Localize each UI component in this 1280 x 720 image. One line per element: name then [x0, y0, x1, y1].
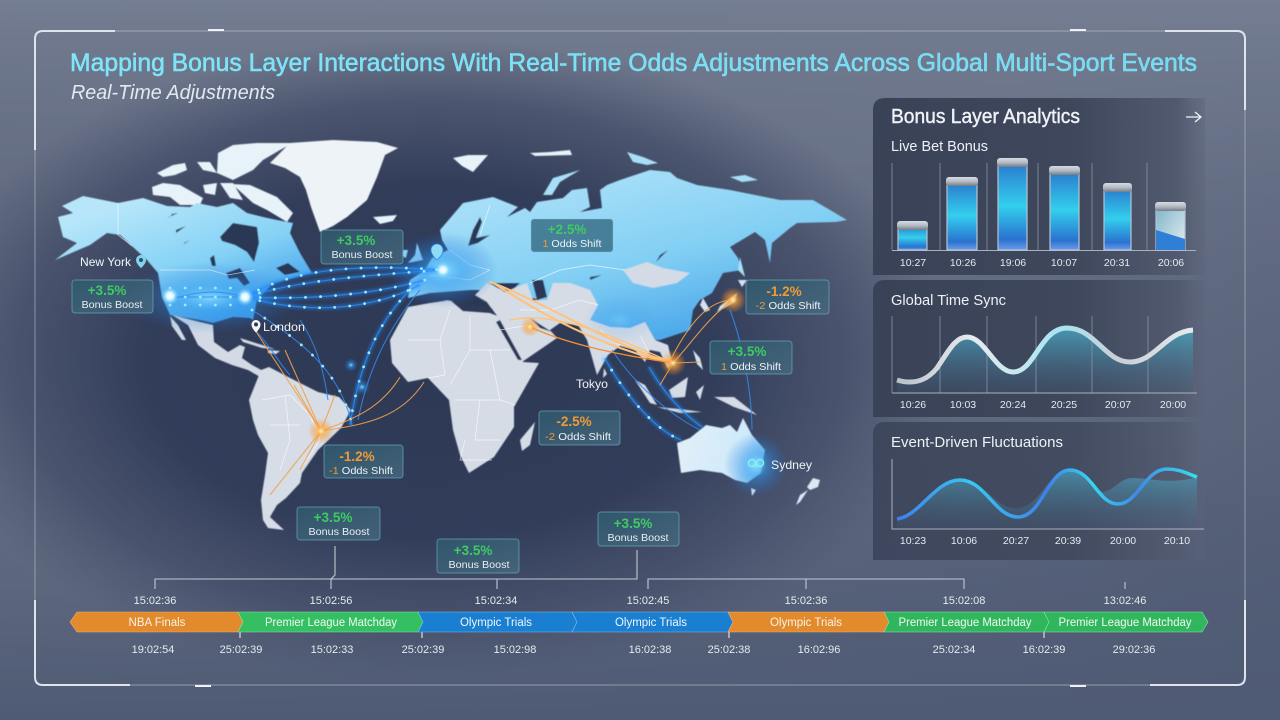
bar chart: 19:06	[1000, 257, 1026, 269]
callout: timeline bonus one: Bonus Boost	[308, 526, 370, 538]
callout: timeline bonus two: Bonus Boost	[448, 559, 510, 571]
callout: asia odds: +3.5%	[728, 344, 766, 359]
arrow	[1186, 112, 1201, 122]
callout: timeline bonus two: +3.5%	[454, 543, 492, 558]
callout: timeline bonus one: +3.5%	[314, 510, 352, 525]
panel: bonus layer analytics	[873, 98, 1205, 275]
top times: 13:02:46	[1104, 595, 1146, 607]
wave chart: 20:00	[1110, 535, 1136, 547]
bar chart: 10:07	[1051, 257, 1077, 269]
callout: timeline bonus two	[437, 539, 519, 573]
pin: london: London	[263, 320, 305, 334]
top times: 15:02:56	[310, 595, 352, 607]
south asia and middle east	[475, 283, 672, 375]
orange route lines	[255, 300, 733, 495]
blue route lines	[170, 268, 752, 440]
bar chart: 20:06	[1158, 257, 1184, 269]
callout: new york bonus	[72, 280, 153, 313]
bottom times: 29:02:36	[1113, 644, 1155, 656]
madagascar	[520, 422, 535, 451]
chevron: premier league: Premier League Matchday	[265, 617, 397, 629]
callout: russia odds: 1 Odds Shift	[542, 238, 602, 250]
callout: south america odds	[324, 445, 403, 478]
area chart: 20:25	[1051, 399, 1077, 411]
label: tokyo: Tokyo	[576, 377, 608, 391]
wave chart: 20:10	[1164, 535, 1190, 547]
new zealand	[751, 478, 820, 505]
greenland	[270, 140, 398, 232]
inland seas	[425, 217, 668, 310]
area chart: 10:26	[900, 399, 926, 411]
callout: south america odds: -1.2%	[339, 449, 375, 464]
area chart: 10:03	[950, 399, 976, 411]
callout: atlantic bonus	[321, 230, 403, 264]
callout: indian ocean odds: -2 Odds Shift	[545, 431, 611, 443]
pin: new york: New York	[80, 255, 132, 269]
caribbean	[170, 316, 280, 354]
australia	[677, 418, 765, 483]
bar chart: 10:27	[900, 257, 926, 269]
callout: south america odds: -1 Odds Shift	[329, 465, 393, 477]
persian gulf	[496, 318, 552, 360]
bottom times: 25:02:39	[402, 644, 444, 656]
chevron: premier league two	[884, 612, 1049, 632]
callout: timeline bonus three	[598, 512, 679, 546]
top times	[134, 595, 1146, 607]
callouts	[72, 219, 829, 573]
world map	[55, 140, 847, 530]
africa	[390, 300, 539, 473]
bottom times: 25:02:34	[933, 644, 975, 656]
chart heading: Live Bet Bonus	[891, 139, 988, 155]
callout: japan odds	[746, 280, 829, 314]
callout: russia odds	[531, 219, 613, 252]
wave chart: 10:06	[951, 535, 977, 547]
connector brackets	[155, 546, 1125, 638]
callout: japan odds: -2 Odds Shift	[756, 300, 821, 312]
bottom times: 19:02:54	[132, 644, 174, 656]
area chart: 20:24	[1000, 399, 1026, 411]
callout: timeline bonus three: +3.5%	[614, 516, 652, 531]
chevron: olympic trials orange: Olympic Trials	[770, 617, 842, 629]
wave chart	[892, 459, 1204, 547]
top times: 15:02:45	[627, 595, 669, 607]
top times: 15:02:36	[134, 595, 176, 607]
chevron: premier league three	[1044, 612, 1208, 632]
country borders	[118, 203, 650, 470]
japan and korea	[693, 280, 747, 370]
bottom times	[132, 644, 1155, 656]
mexico and central america	[172, 315, 265, 378]
chevron: nba finals	[70, 612, 243, 632]
bottom times: 15:02:33	[311, 644, 353, 656]
bottom times: 16:02:96	[798, 644, 840, 656]
chevron: premier league three: Premier League Matchday	[1058, 617, 1192, 629]
bottom times: 16:02:39	[1023, 644, 1065, 656]
pin: sydney	[748, 458, 812, 472]
blue route dots	[170, 268, 681, 440]
panel: global time sync	[873, 280, 1205, 417]
callout: asia odds: 1 Odds Shift	[721, 361, 781, 373]
chevron: nba finals: NBA Finals	[129, 617, 186, 629]
callout: new york bonus: +3.5%	[88, 283, 126, 298]
arctic islands	[152, 143, 758, 224]
bar chart: 20:31	[1104, 257, 1130, 269]
south america	[249, 367, 351, 530]
north america	[55, 196, 312, 323]
top times: 15:02:34	[475, 595, 517, 607]
callout: indian ocean odds: -2.5%	[556, 414, 592, 429]
callout: atlantic bonus: Bonus Boost	[332, 249, 393, 261]
chart heading: Global Time Sync	[891, 292, 1006, 309]
panel: event-driven fluctuations	[873, 422, 1205, 560]
bottom times: 15:02:98	[494, 644, 536, 656]
area chart: 20:00	[1160, 399, 1186, 411]
blue route glow	[245, 268, 702, 440]
atlantic crossing nodes	[344, 358, 370, 395]
bar chart	[892, 158, 1196, 269]
glow on us and europe	[120, 232, 788, 497]
callout: asia odds	[710, 341, 792, 374]
chevron: olympic trials two: Olympic Trials	[615, 617, 687, 629]
callout: new york bonus: Bonus Boost	[82, 299, 143, 311]
top times: 15:02:36	[785, 595, 827, 607]
callout: japan odds: -1.2%	[766, 284, 802, 299]
route nodes	[161, 262, 746, 444]
chevron: olympic trials two	[572, 612, 733, 632]
timeline	[70, 546, 1208, 656]
callout: indian ocean odds	[539, 411, 620, 445]
chevron: olympic trials orange	[728, 612, 889, 632]
wave chart: 20:39	[1055, 535, 1081, 547]
callout: atlantic bonus: +3.5%	[337, 233, 375, 248]
area chart	[892, 316, 1197, 411]
bottom times: 16:02:38	[629, 644, 671, 656]
uk	[402, 243, 423, 263]
title: Mapping Bonus Layer Interactions With Real-Time Odds Adjustments Across Global Multi-Sport Events	[70, 49, 1197, 77]
callout: russia odds: +2.5%	[548, 222, 586, 237]
indonesia	[603, 368, 757, 415]
callout: timeline bonus three: Bonus Boost	[608, 532, 669, 544]
chart heading: Event-Driven Fluctuations	[891, 434, 1063, 451]
wave chart: 10:23	[900, 535, 926, 547]
top times: 15:02:08	[943, 595, 985, 607]
pin: sydney: Sydney	[771, 458, 812, 472]
wave chart: 20:27	[1003, 535, 1029, 547]
chevron: premier league	[238, 612, 423, 632]
bottom times: 25:02:39	[220, 644, 262, 656]
chevron: premier league two: Premier League Matchday	[898, 617, 1032, 629]
mongolia	[623, 262, 690, 288]
pin: europe	[431, 244, 443, 260]
bar chart: 10:26	[950, 257, 976, 269]
area chart: 20:07	[1105, 399, 1131, 411]
orange middle east routes	[490, 282, 673, 363]
chevron: olympic trials one	[418, 612, 577, 632]
bottom times: 25:02:38	[708, 644, 750, 656]
eurasia	[408, 170, 847, 340]
landmasses	[55, 140, 847, 530]
panel heading: Bonus Layer Analytics	[891, 106, 1080, 128]
city pins and labels	[80, 244, 812, 472]
chevron: olympic trials one: Olympic Trials	[460, 617, 532, 629]
subtitle: Real-Time Adjustments	[71, 82, 275, 104]
hudson bay and lakes	[167, 213, 300, 286]
callout: timeline bonus one	[297, 507, 380, 540]
